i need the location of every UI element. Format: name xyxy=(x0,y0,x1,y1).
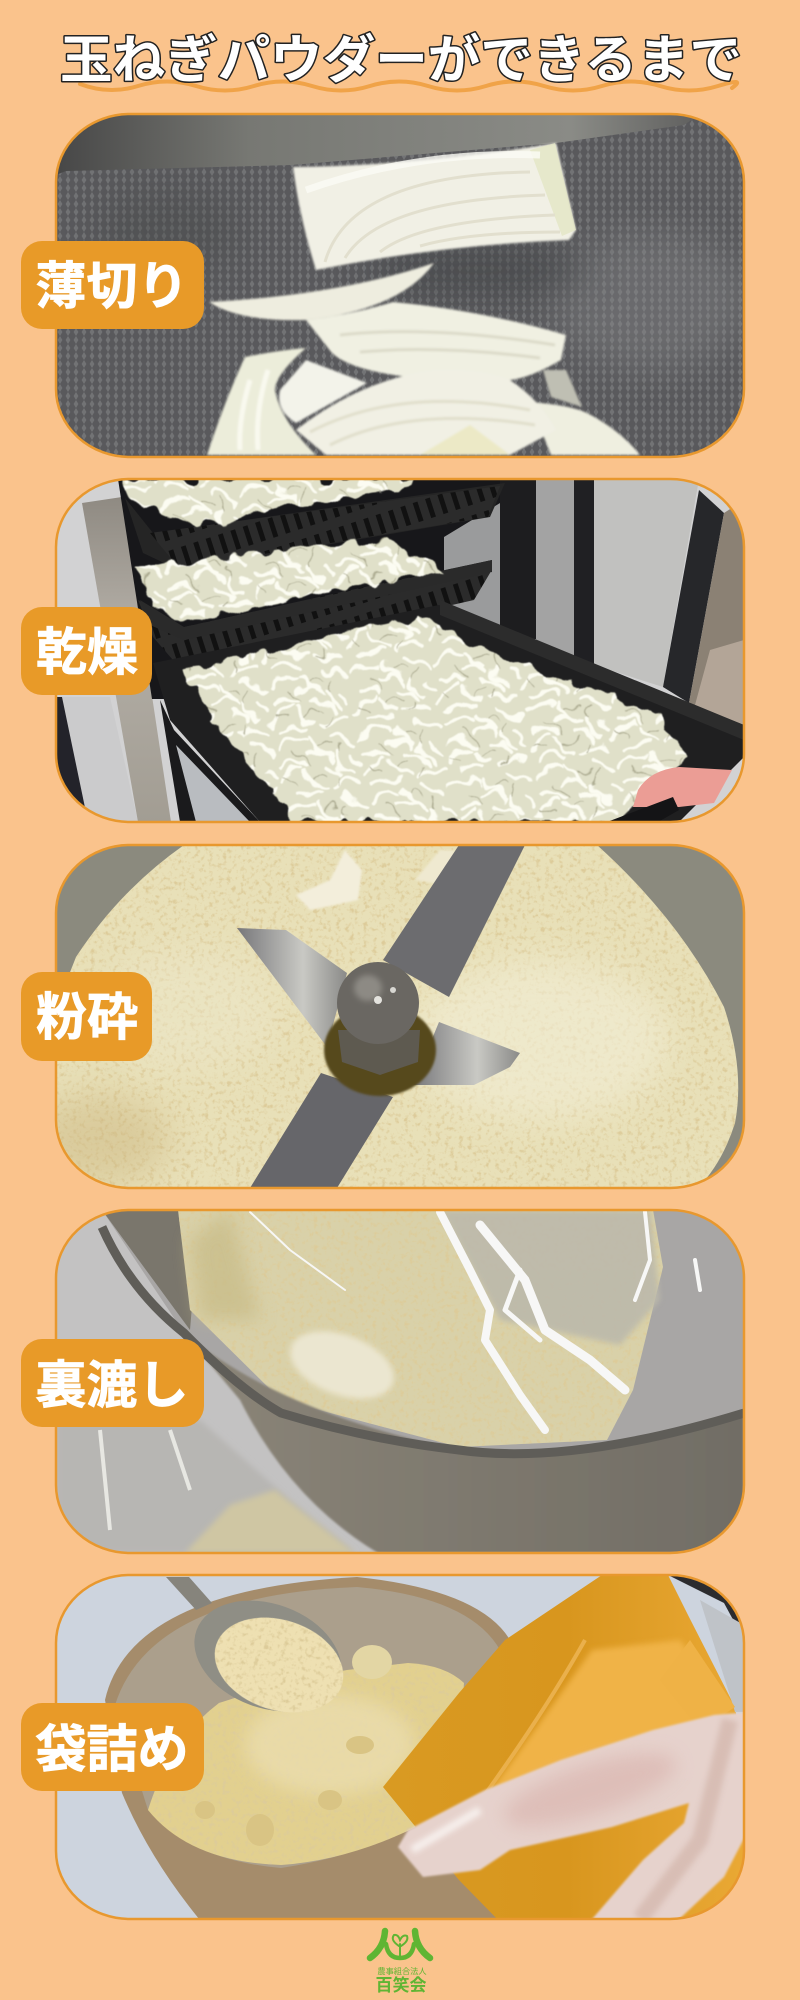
logo name: 百笑会 xyxy=(376,1976,426,1995)
gloved hand xyxy=(398,1712,750,1925)
logo small text: 農事組合法人 xyxy=(377,1966,427,1976)
sieve interior xyxy=(102,1210,744,1457)
onion slices xyxy=(207,263,640,455)
panel: drying xyxy=(21,479,744,822)
panel: grinding xyxy=(21,845,744,1195)
plastic film highlights xyxy=(250,1212,700,1430)
panel: packing xyxy=(21,1575,750,1925)
label: 薄切り xyxy=(21,241,204,329)
panel border xyxy=(56,479,744,822)
label: 裏漉し xyxy=(21,1339,204,1427)
logo xyxy=(370,1931,430,1995)
label: 粉砕: 粉砕 xyxy=(36,989,138,1046)
upper tray xyxy=(125,479,505,570)
sieve rim xyxy=(102,1227,744,1454)
label: 裏漉し: 裏漉し xyxy=(35,1357,189,1414)
logo mark: two people and sprout xyxy=(370,1931,430,1958)
label: 乾燥 xyxy=(21,607,152,695)
panel border xyxy=(56,845,744,1188)
panel: slicing xyxy=(21,114,750,457)
label: 粉砕 xyxy=(21,972,152,1061)
label: 袋詰め: 袋詰め xyxy=(35,1721,189,1778)
photo: powder and packaging bag xyxy=(56,1575,750,1925)
powder mound xyxy=(50,845,738,1195)
panel border xyxy=(56,1210,744,1553)
middle tray xyxy=(138,540,492,667)
onion wedge xyxy=(293,143,576,270)
kitchen knife xyxy=(56,114,700,175)
powder lumps in bowl xyxy=(195,1645,392,1846)
panel border xyxy=(56,114,744,457)
panel border xyxy=(56,1575,744,1919)
label: 袋詰め xyxy=(21,1703,204,1791)
panel: straining xyxy=(21,1210,744,1553)
title wave underline xyxy=(80,82,737,90)
label: 薄切り: 薄切り xyxy=(35,258,189,315)
photo: onion on cutting mat xyxy=(56,114,750,457)
dryer cabinet xyxy=(56,479,744,822)
sieve outer wall xyxy=(204,1350,743,1552)
plastic and spilled powder xyxy=(56,1420,355,1553)
label: 乾燥: 乾燥 xyxy=(36,624,138,681)
powder lumps xyxy=(296,850,362,910)
bowl xyxy=(105,1577,540,1925)
spoon xyxy=(166,1577,344,1712)
hand holding tray xyxy=(607,767,732,822)
blade xyxy=(237,845,525,1188)
title xyxy=(60,32,742,90)
powder lump xyxy=(288,1329,396,1402)
title text: 玉ねぎパウダーができるまで xyxy=(60,32,742,90)
photo: blender blade in powder xyxy=(30,845,744,1195)
lower tray xyxy=(153,600,744,822)
photo: powder in sieve xyxy=(56,1210,744,1553)
powder in bowl xyxy=(148,1663,464,1865)
packaging bag xyxy=(383,1575,750,1925)
photo: onion strips on dryer trays xyxy=(56,479,744,822)
